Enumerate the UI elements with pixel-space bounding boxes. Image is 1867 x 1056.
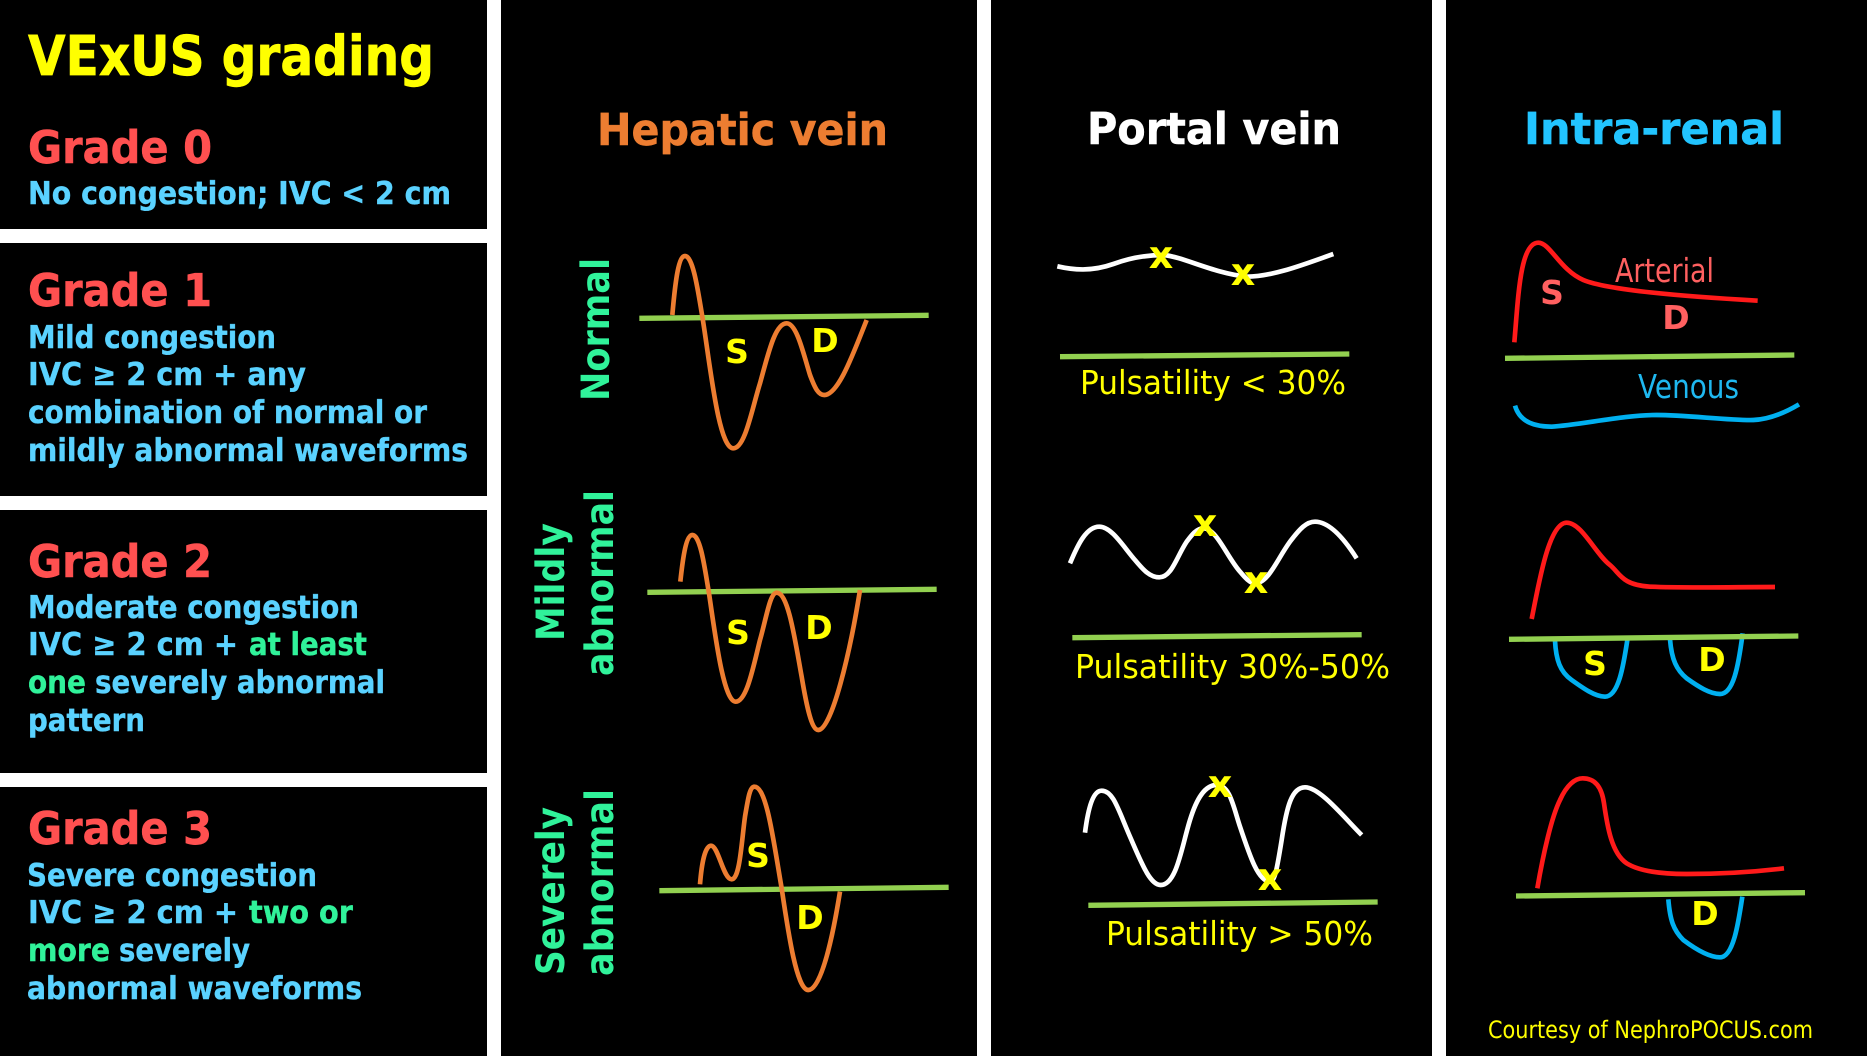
chart: intra-renal normal waveforms: Arterial	[1615, 251, 1714, 290]
text: grade 1 description: combination of normal or	[28, 395, 427, 431]
chart: intra-renal normal waveforms: S	[1540, 273, 1564, 312]
text: grade 2 description	[28, 590, 385, 739]
text: grade 0 description: No congestion; IVC < 2 cm	[28, 176, 451, 212]
text: grade 3 description: more	[28, 933, 110, 969]
chart: intra-renal biphasic waveforms	[1509, 523, 1798, 697]
text: grade 2 description: one	[28, 665, 86, 701]
chart: hepatic mildly abnormal waveform: D	[805, 608, 833, 647]
chart: portal pulsatility 30-50%: x	[1193, 501, 1217, 545]
chart: portal pulsatility below 30%: x	[1231, 250, 1255, 294]
text: grade 3 description: IVC ≥ 2 cm +	[28, 895, 238, 931]
text: grade 2 description: at least	[249, 627, 367, 663]
chart: intra-renal normal waveforms	[1505, 243, 1799, 427]
label: normal: Normal	[574, 258, 619, 401]
text: grade 3 description: two or	[249, 895, 353, 931]
panel: grade 2	[0, 510, 487, 773]
chart: hepatic normal waveform: S	[725, 332, 749, 371]
text: grade 3 description: severely	[119, 933, 250, 969]
label: mildly abnormal	[529, 490, 623, 676]
chart: hepatic severely abnormal waveform	[659, 787, 949, 990]
chart: hepatic mildly abnormal waveform: S	[726, 613, 750, 652]
text: grade 1 description: IVC ≥ 2 cm + any	[28, 357, 306, 393]
chart: hepatic normal waveform: D	[811, 321, 839, 360]
text: grade 2 description: Moderate congestion	[28, 590, 359, 626]
text: grade 3 description	[27, 858, 362, 1007]
label: severely abnormal	[529, 789, 623, 976]
chart: intra-renal biphasic waveforms: S	[1583, 644, 1607, 683]
heading: intra-renal: Intra-renal	[1524, 104, 1784, 155]
heading: grade 0: Grade 0	[28, 121, 212, 174]
label: severely abnormal: abnormal	[578, 789, 623, 976]
chart: intra-renal biphasic waveforms: D	[1698, 640, 1726, 679]
chart: hepatic severely abnormal waveform: S	[746, 836, 770, 875]
panel: title and grade 0	[0, 0, 487, 229]
text: grade 2 description: pattern	[28, 703, 145, 739]
heading: grade 1: Grade 1	[28, 264, 212, 317]
chart: portal pulsatility below 30%: x	[1149, 233, 1173, 277]
chart: portal pulsatility below 30%: Pulsatility < 30%	[1080, 363, 1346, 402]
heading: portal vein: Portal vein	[1087, 104, 1341, 155]
chart: intra-renal monophasic waveforms: D	[1691, 894, 1719, 933]
text: grade 1 description: Mild congestion	[28, 320, 276, 356]
panel: portal vein	[991, 0, 1432, 1056]
chart: intra-renal monophasic waveforms	[1516, 778, 1805, 957]
chart: portal pulsatility 30-50%: x	[1244, 558, 1268, 602]
text: grade 3 description: abnormal waveforms	[27, 971, 362, 1007]
chart: portal pulsatility 30-50%	[1070, 501, 1390, 686]
text: grade 1 description: mildly abnormal waveforms	[28, 433, 468, 469]
label: mildly abnormal: abnormal	[578, 490, 623, 676]
chart: intra-renal normal waveforms: D	[1662, 298, 1690, 337]
chart: portal pulsatility above 50%: Pulsatility > 50%	[1106, 914, 1373, 953]
panel: intra-renal	[1446, 0, 1867, 1056]
text: grade 2 description: IVC ≥ 2 cm +	[28, 627, 238, 663]
label: mildly abnormal: Mildly	[529, 523, 574, 641]
credit line: Courtesy of NephroPOCUS.com	[1488, 1016, 1813, 1044]
chart: hepatic normal waveform	[639, 256, 929, 448]
text: grade 2 description: severely abnormal	[95, 665, 385, 701]
panel: grade 3	[0, 787, 487, 1056]
chart: portal pulsatility above 50%	[1085, 762, 1378, 953]
chart: portal pulsatility above 50%: x	[1208, 762, 1232, 806]
text: grade 3 description: Severe congestion	[27, 858, 317, 894]
text: grade 1 description	[28, 320, 468, 469]
chart: hepatic severely abnormal waveform: D	[796, 898, 824, 937]
chart: portal pulsatility above 50%: x	[1258, 855, 1282, 899]
chart: portal pulsatility below 30%	[1057, 233, 1349, 402]
label: severely abnormal: Severely	[529, 807, 574, 975]
title: VExUS grading	[28, 24, 434, 88]
heading: hepatic vein: Hepatic vein	[597, 105, 888, 156]
chart: intra-renal normal waveforms: Venous	[1638, 367, 1739, 406]
chart: portal pulsatility 30-50%: Pulsatility 30%-50%	[1075, 647, 1390, 686]
panel: hepatic vein	[501, 0, 977, 1056]
panel: grade 1	[0, 243, 487, 496]
chart: hepatic mildly abnormal waveform	[647, 535, 937, 730]
heading: grade 3: Grade 3	[28, 802, 212, 855]
heading: grade 2: Grade 2	[28, 535, 212, 588]
